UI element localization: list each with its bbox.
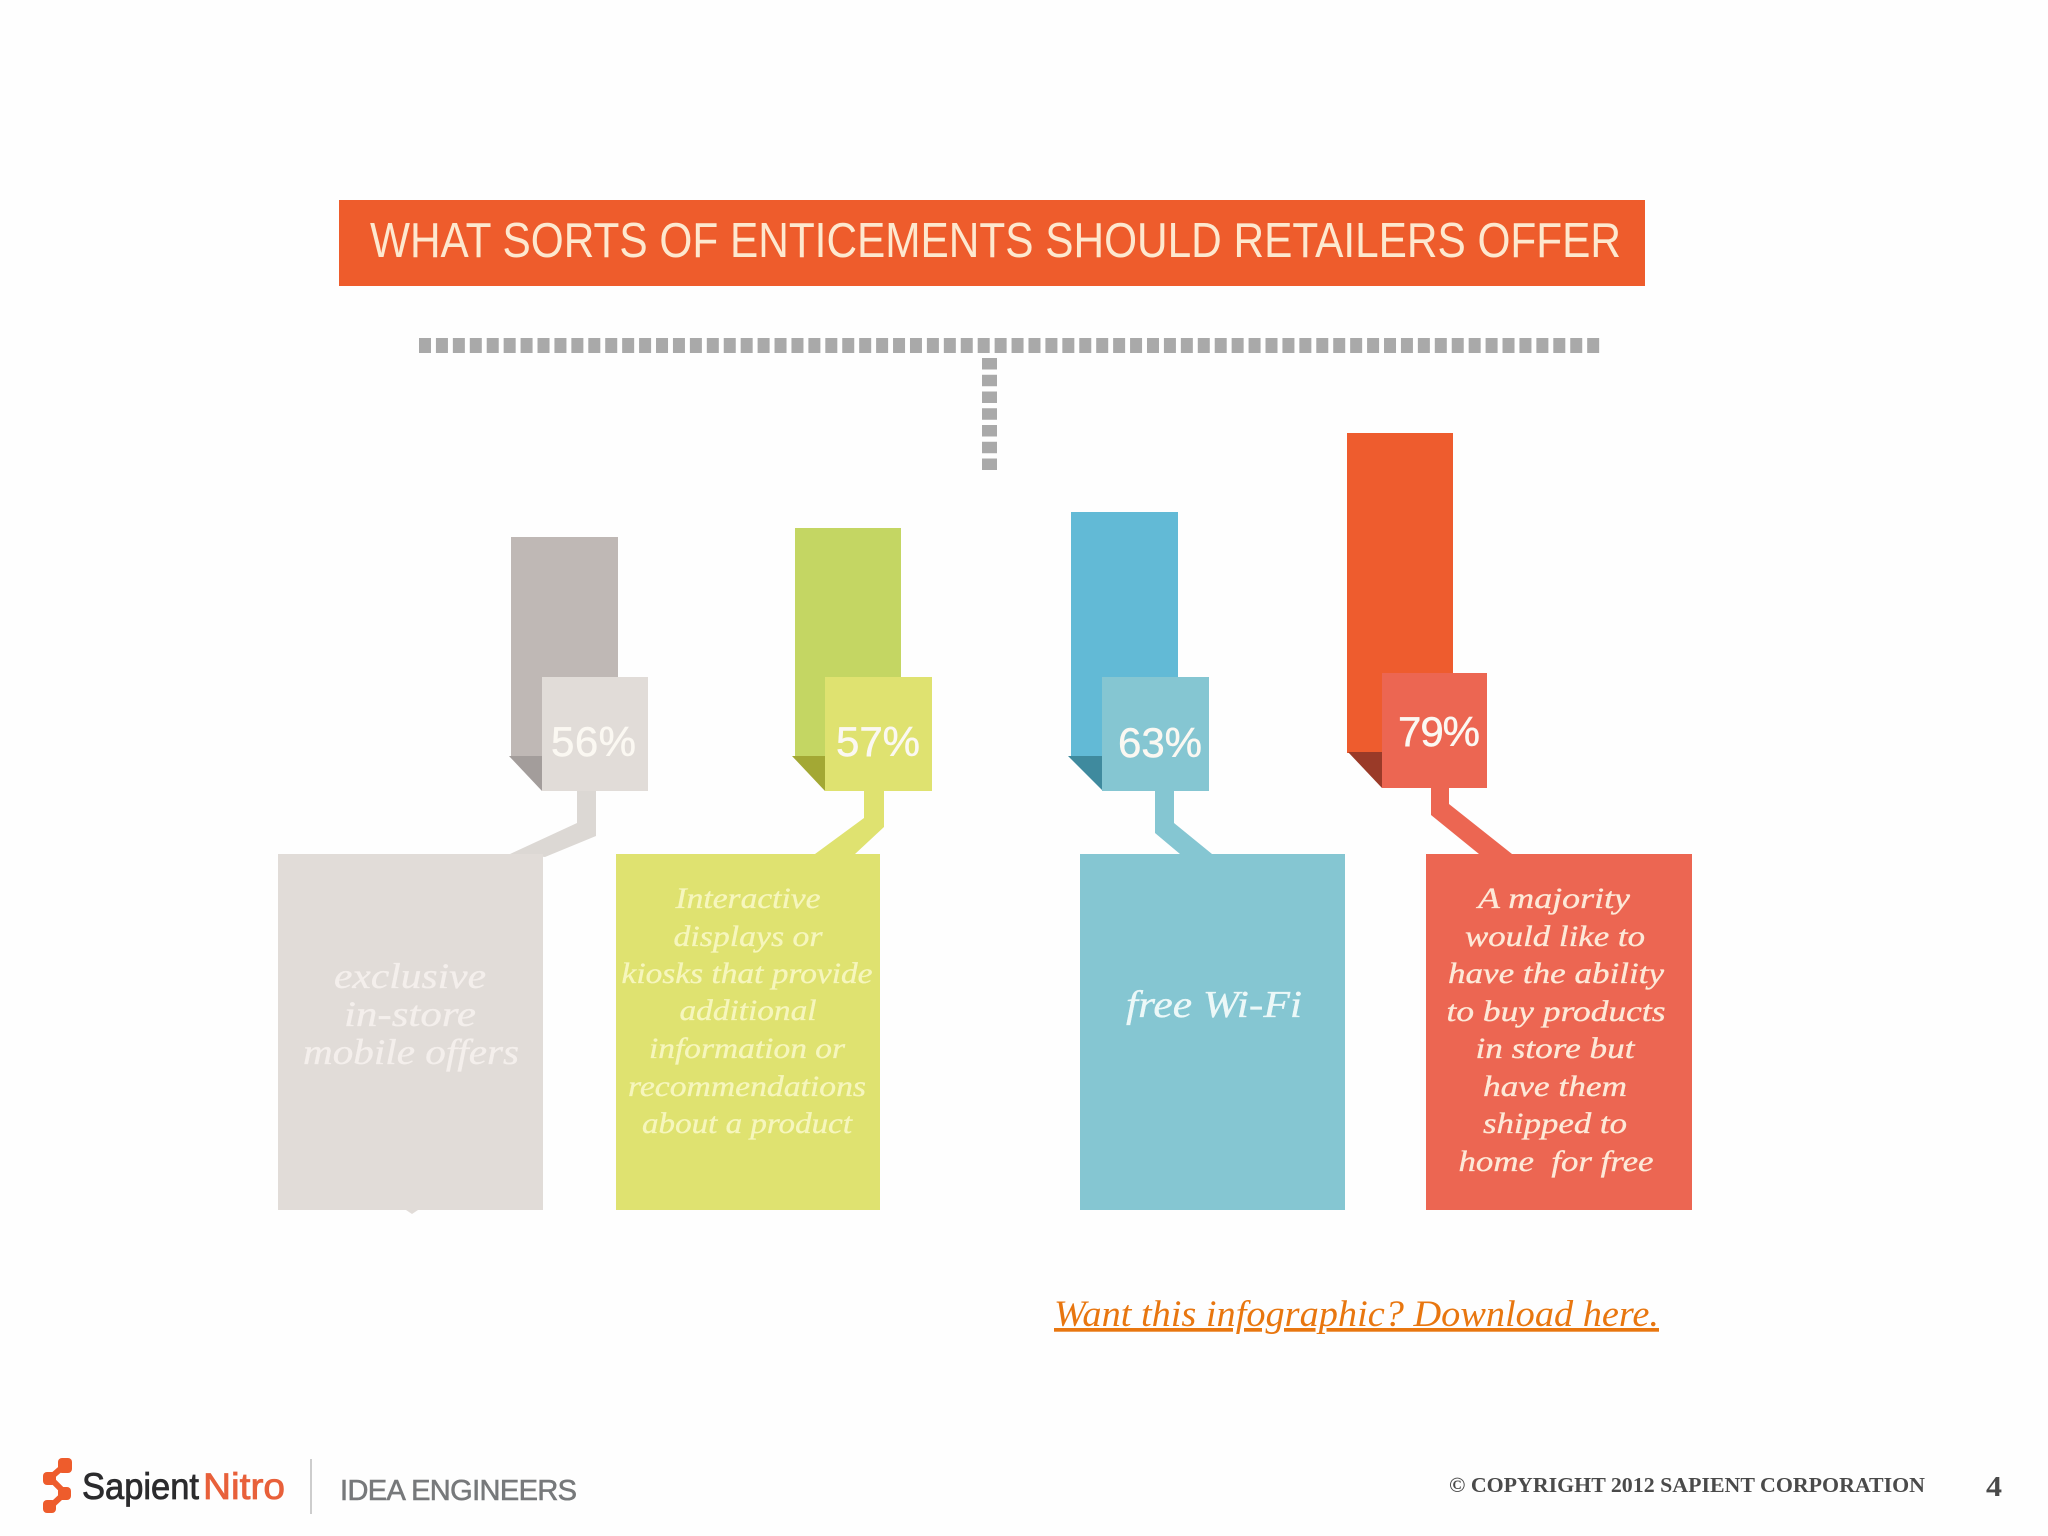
percent value: 57% (836, 718, 920, 765)
description text: recommendations (628, 1070, 866, 1103)
description box (1426, 854, 1692, 1210)
column: 56% exclusive in-store mobile offers (278, 537, 648, 1214)
logo: SapientNitro (43, 1458, 285, 1513)
percent value: 56% (551, 718, 636, 765)
description text: displays or (674, 920, 823, 953)
description text: exclusive (334, 956, 486, 996)
percent value: 79% (1398, 708, 1480, 755)
bar fold (509, 756, 542, 791)
bar: 63% (1071, 512, 1178, 757)
description text: information or (649, 1032, 845, 1065)
description text: additional (680, 994, 816, 1027)
description text: to buy products (1446, 995, 1666, 1028)
bar: 57% (795, 528, 901, 757)
description text: A majority (1476, 882, 1631, 915)
percent tag (1382, 673, 1487, 788)
copyright: © COPYRIGHT 2012 SAPIENT CORPORATION (1449, 1473, 1925, 1497)
description box (616, 854, 880, 1210)
column: 63% free Wi-Fi (1068, 512, 1345, 1210)
tagline: IDEA ENGINEERS (340, 1475, 577, 1507)
logo divider (310, 1459, 312, 1514)
bar: 79% (1347, 433, 1453, 753)
dotted connector (419, 346, 1600, 470)
bar: 56% (511, 537, 618, 757)
percent tag (542, 677, 648, 791)
bar fold (792, 756, 825, 791)
percent tag (825, 677, 932, 791)
description text: have the ability (1448, 957, 1665, 990)
title banner (339, 200, 1645, 286)
page number: 4 (1986, 1472, 2002, 1503)
percent value: 63% (1118, 719, 1202, 766)
bar fold (1348, 752, 1382, 788)
percent tag (1102, 677, 1209, 791)
description box (278, 854, 543, 1214)
description text (622, 882, 872, 1140)
connector (1431, 788, 1512, 854)
download link: Want this infographic? Download here. (1054, 1294, 1659, 1335)
description text: mobile offers (303, 1032, 519, 1072)
connector (1155, 791, 1212, 854)
column: 57% interactive displays (616, 528, 932, 1210)
wordmark: Sapient (82, 1466, 200, 1507)
description text (1446, 882, 1666, 1178)
connector (815, 791, 884, 854)
column: 79% ship to home for free (1347, 433, 1692, 1210)
description text: in store but (1476, 1032, 1635, 1065)
description text: free Wi-Fi (1126, 984, 1302, 1026)
description box (1080, 854, 1345, 1210)
icon: logo mark (43, 1458, 72, 1513)
description text: about a product (642, 1107, 853, 1140)
description text: have them (1483, 1070, 1627, 1103)
description text: in-store (344, 994, 476, 1034)
wordmark (82, 1466, 285, 1507)
connector (510, 791, 596, 857)
description text: Interactive (674, 882, 820, 915)
description text (303, 956, 519, 1072)
description text: home for free (1458, 1145, 1654, 1178)
bar fold (1068, 756, 1103, 791)
wordmark: Nitro (203, 1466, 285, 1507)
description text: shipped to (1483, 1107, 1627, 1140)
description text: would like to (1465, 920, 1645, 953)
description text: kiosks that provide (622, 957, 872, 990)
title banner: WHAT SORTS OF ENTICEMENTS SHOULD RETAILERS OFFER (370, 214, 1621, 268)
